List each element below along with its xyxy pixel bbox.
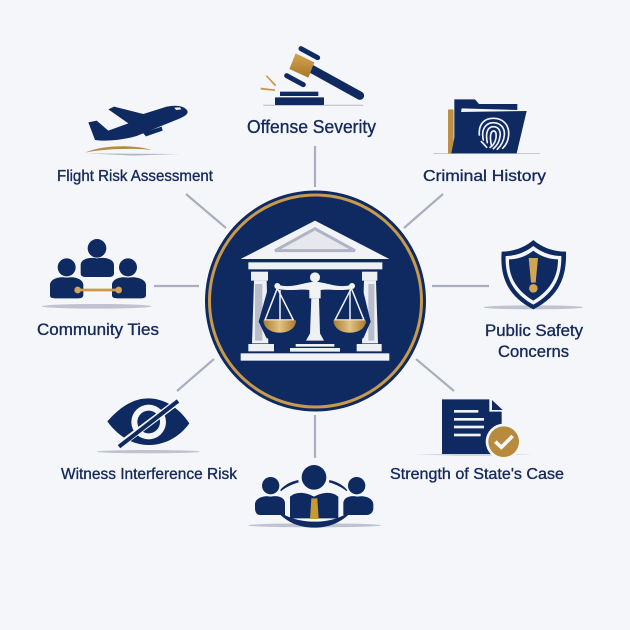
label: offense severity: Offense Severity <box>247 117 376 137</box>
connector spokes <box>154 146 489 458</box>
factor: criminal history <box>423 99 546 185</box>
icon: group with central figure in tie <box>248 465 381 528</box>
label: witness interference risk: Witness Interference Risk <box>61 466 238 483</box>
factor: flight risk <box>57 106 214 185</box>
icon: three people linked <box>42 239 152 309</box>
central emblem: courthouse and scales <box>205 190 426 412</box>
icon: document with check badge <box>413 399 533 460</box>
label: public safety concerns <box>485 322 584 361</box>
label: strength of state's case: Strength of State's Case <box>390 466 564 483</box>
factor: community ties <box>37 239 159 339</box>
label: flight risk assessment: Flight Risk Assessment <box>57 168 214 185</box>
icon: shield with exclamation <box>483 240 583 309</box>
icon: airplane <box>85 106 188 156</box>
factor: public safety <box>483 240 584 361</box>
factor: group of people, no label <box>248 465 381 528</box>
label: public safety concerns: Concerns <box>498 343 569 361</box>
label: community ties: Community Ties <box>37 321 159 339</box>
icon: gavel <box>261 49 363 106</box>
icon: folder with fingerprint <box>433 99 540 154</box>
factor: witness interference <box>61 398 238 483</box>
factor: offense severity <box>247 49 376 137</box>
icon: crossed-out eye <box>97 398 200 453</box>
label: criminal history: Criminal History <box>423 168 546 185</box>
factor: strength of state's case <box>390 399 564 483</box>
label: public safety concerns: Public Safety <box>485 322 584 340</box>
